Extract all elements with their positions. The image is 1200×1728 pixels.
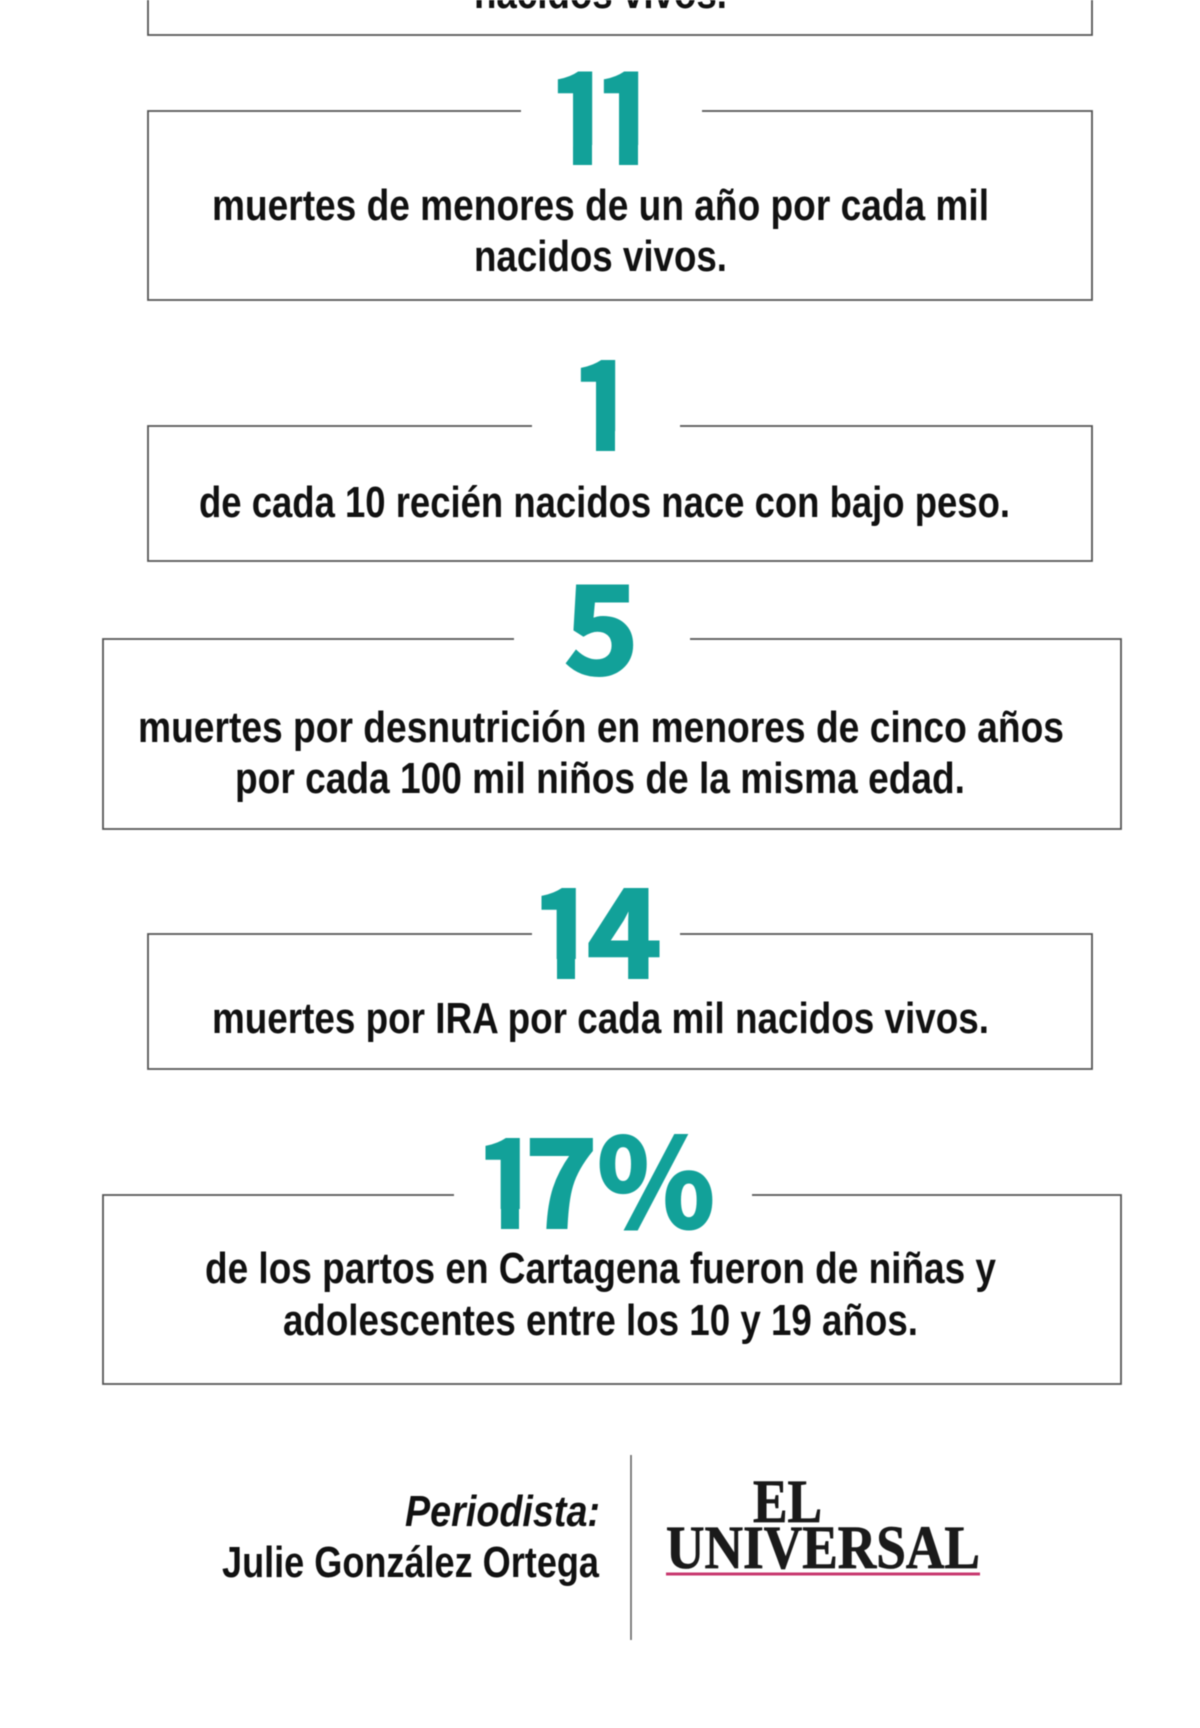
panel: cropped top statistic [148,0,1092,35]
text: adolescent births description: adolescentes entre los 10 y 19 años. [283,1296,918,1345]
text: infant deaths description: nacidos vivos. [474,232,727,281]
logo: El Universal: EL [753,1469,822,1536]
text: adolescent births description: de los partos en Cartagena fueron de niñas y [205,1244,996,1293]
divider [630,1455,632,1640]
number: 5: 5 [564,532,639,709]
text: IRA description: muertes por IRA por cada mil nacidos vivos. [212,994,989,1043]
panel: malnutrition deaths [103,532,1121,829]
number: 14: 4 [587,836,662,1013]
credit: journalist: Julie González Ortega [222,1538,599,1587]
panel: adolescent births [101,1133,1123,1386]
credit: journalist [222,1487,600,1587]
number: 17%: 7% [525,1086,715,1264]
logo: El Universal: UNIVERSAL [666,1515,980,1582]
number: 14: 1 [531,836,597,1013]
text: low birth weight description: de cada 10 recién nacidos nace con bajo peso. [199,478,1010,527]
number: 11: 11 [547,22,659,199]
number: 17% [484,1133,714,1232]
panel: infant deaths [146,70,1094,302]
text: malnutrition description: por cada 100 mil niños de la misma edad. [235,754,965,803]
panel: low birth weight [146,359,1094,563]
panel: IRA deaths [146,887,1094,1071]
credit: journalist: Periodista: [405,1487,600,1536]
text: infant deaths description: muertes de menores de un año por cada mil [212,181,989,230]
number: 17%: 1 [475,1086,541,1263]
logo: El Universal [666,1469,980,1582]
number: 1: 1 [570,308,636,485]
number: 14 [540,887,660,980]
